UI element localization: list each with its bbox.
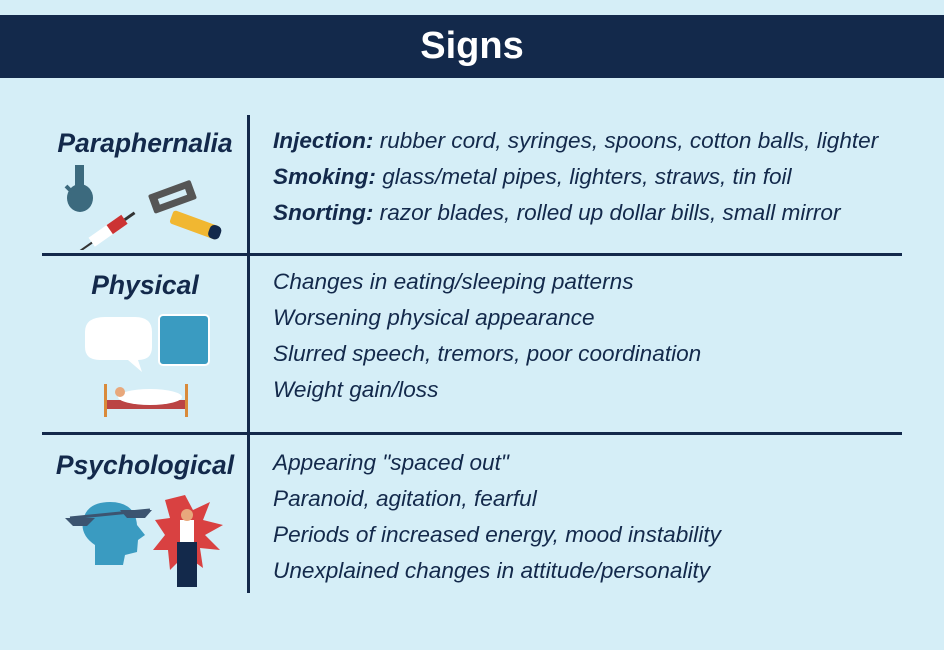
text: psychological: Unexplained changes in attitude/personality [273,558,710,583]
label: Paraphernalia: Paraphernalia [57,128,233,158]
icon: paraphernalia [64,165,222,250]
text: paraphernalia: Snorting: razor blades, rolled up dollar bills, small mirror [273,200,841,225]
text: paraphernalia: Injection: rubber cord, syringes, spoons, cotton balls, lighter [273,128,878,153]
title bar: Signs [420,25,524,67]
text: physical: Slurred speech, tremors, poor coordination [273,341,701,366]
text: physical [273,269,701,402]
label: Physical: Physical [91,270,199,300]
title bar [0,15,944,78]
text: physical: Weight gain/loss [273,377,438,402]
text: psychological: Appearing "spaced out" [273,450,509,475]
text: paraphernalia: Smoking: glass/metal pipes, lighters, straws, tin foil [273,164,792,189]
text: psychological [272,450,722,583]
text: physical: Worsening physical appearance [273,305,595,330]
label: Psychological: Psychological [56,450,234,480]
text: psychological: Paranoid, agitation, fearful [273,486,537,511]
text: physical: Changes in eating/sleeping patterns [273,269,634,294]
text: psychological: Periods of increased energy, mood instability [273,522,721,547]
icon: psychological [65,495,223,587]
text: paraphernalia [273,128,879,225]
icon: physical [85,314,210,417]
